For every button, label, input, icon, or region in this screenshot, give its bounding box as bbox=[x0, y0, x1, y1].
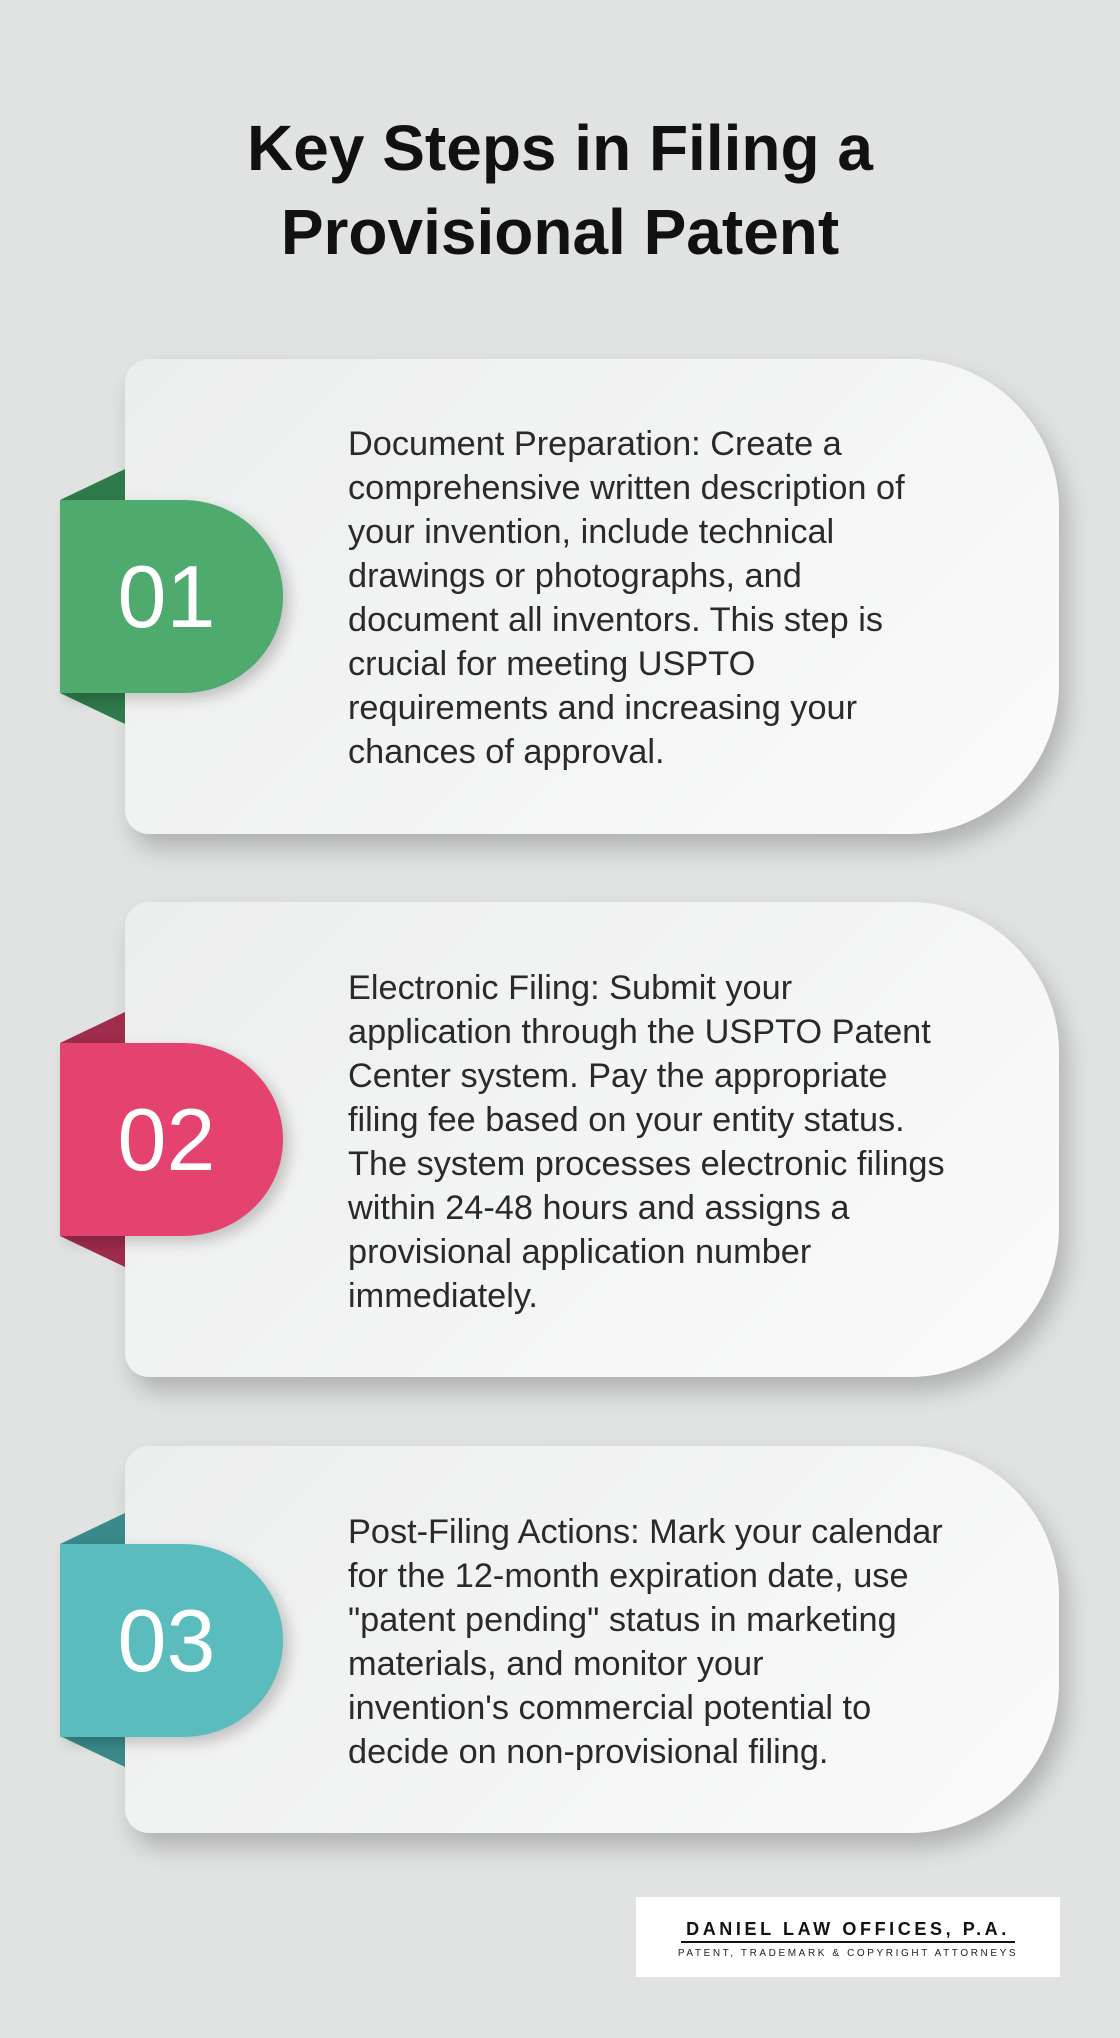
fold bottom 2 bbox=[60, 1236, 125, 1267]
badge 01: 01 bbox=[118, 547, 215, 646]
text step 3: "patent pending" status in marketing bbox=[348, 1601, 897, 1639]
text step 2: within 24-48 hours and assigns a bbox=[348, 1189, 849, 1227]
fold top 2 bbox=[60, 1012, 125, 1043]
logo: DANIEL LAW OFFICES, P.A. bbox=[686, 1919, 1010, 1939]
text step 3: decide on non-provisional filing. bbox=[348, 1733, 828, 1771]
fold bottom 1 bbox=[60, 693, 125, 724]
title bbox=[247, 112, 874, 268]
badge 02: 02 bbox=[118, 1090, 215, 1189]
text step 1 bbox=[348, 425, 905, 771]
text step 3 bbox=[348, 1513, 943, 1771]
text step 1: crucial for meeting USPTO bbox=[348, 645, 755, 683]
text step 1: requirements and increasing your bbox=[348, 689, 857, 727]
text step 1: document all inventors. This step is bbox=[348, 601, 883, 639]
text step 2: immediately. bbox=[348, 1277, 538, 1315]
text step 1: chances of approval. bbox=[348, 733, 664, 771]
title: Provisional Patent bbox=[281, 196, 839, 268]
logo: PATENT, TRADEMARK & COPYRIGHT ATTORNEYS bbox=[678, 1948, 1018, 1959]
panel: step 1 bbox=[125, 359, 1059, 834]
text step 3: materials, and monitor your bbox=[348, 1645, 764, 1683]
text step 2: provisional application number bbox=[348, 1233, 811, 1271]
text step 3: invention's commercial potential to bbox=[348, 1689, 871, 1727]
text step 2: The system processes electronic filings bbox=[348, 1145, 945, 1183]
text step 2: Electronic Filing: Submit your bbox=[348, 969, 792, 1007]
text step 1: your invention, include technical bbox=[348, 513, 834, 551]
text step 1: drawings or photographs, and bbox=[348, 557, 802, 595]
fold top 1 bbox=[60, 469, 125, 500]
fold top 3 bbox=[60, 1513, 125, 1544]
text step 2: application through the USPTO Patent bbox=[348, 1013, 931, 1051]
panel: step 2 bbox=[125, 902, 1059, 1377]
text step 3: for the 12-month expiration date, use bbox=[348, 1557, 909, 1595]
badge 01 bbox=[60, 500, 283, 693]
text step 1: comprehensive written description of bbox=[348, 469, 905, 507]
text step 3: Post-Filing Actions: Mark your calendar bbox=[348, 1513, 943, 1551]
badge 03 bbox=[60, 1544, 283, 1737]
panel: step 3 bbox=[125, 1446, 1059, 1833]
text step 2 bbox=[348, 969, 945, 1315]
badge 03: 03 bbox=[118, 1591, 215, 1690]
title: Key Steps in Filing a bbox=[247, 112, 873, 184]
badge 02 bbox=[60, 1043, 283, 1236]
text step 2: filing fee based on your entity status. bbox=[348, 1101, 905, 1139]
fold bottom 3 bbox=[62, 1737, 125, 1767]
logo bbox=[636, 1897, 1060, 1977]
text step 2: Center system. Pay the appropriate bbox=[348, 1057, 888, 1095]
text step 1: Document Preparation: Create a bbox=[348, 425, 842, 463]
